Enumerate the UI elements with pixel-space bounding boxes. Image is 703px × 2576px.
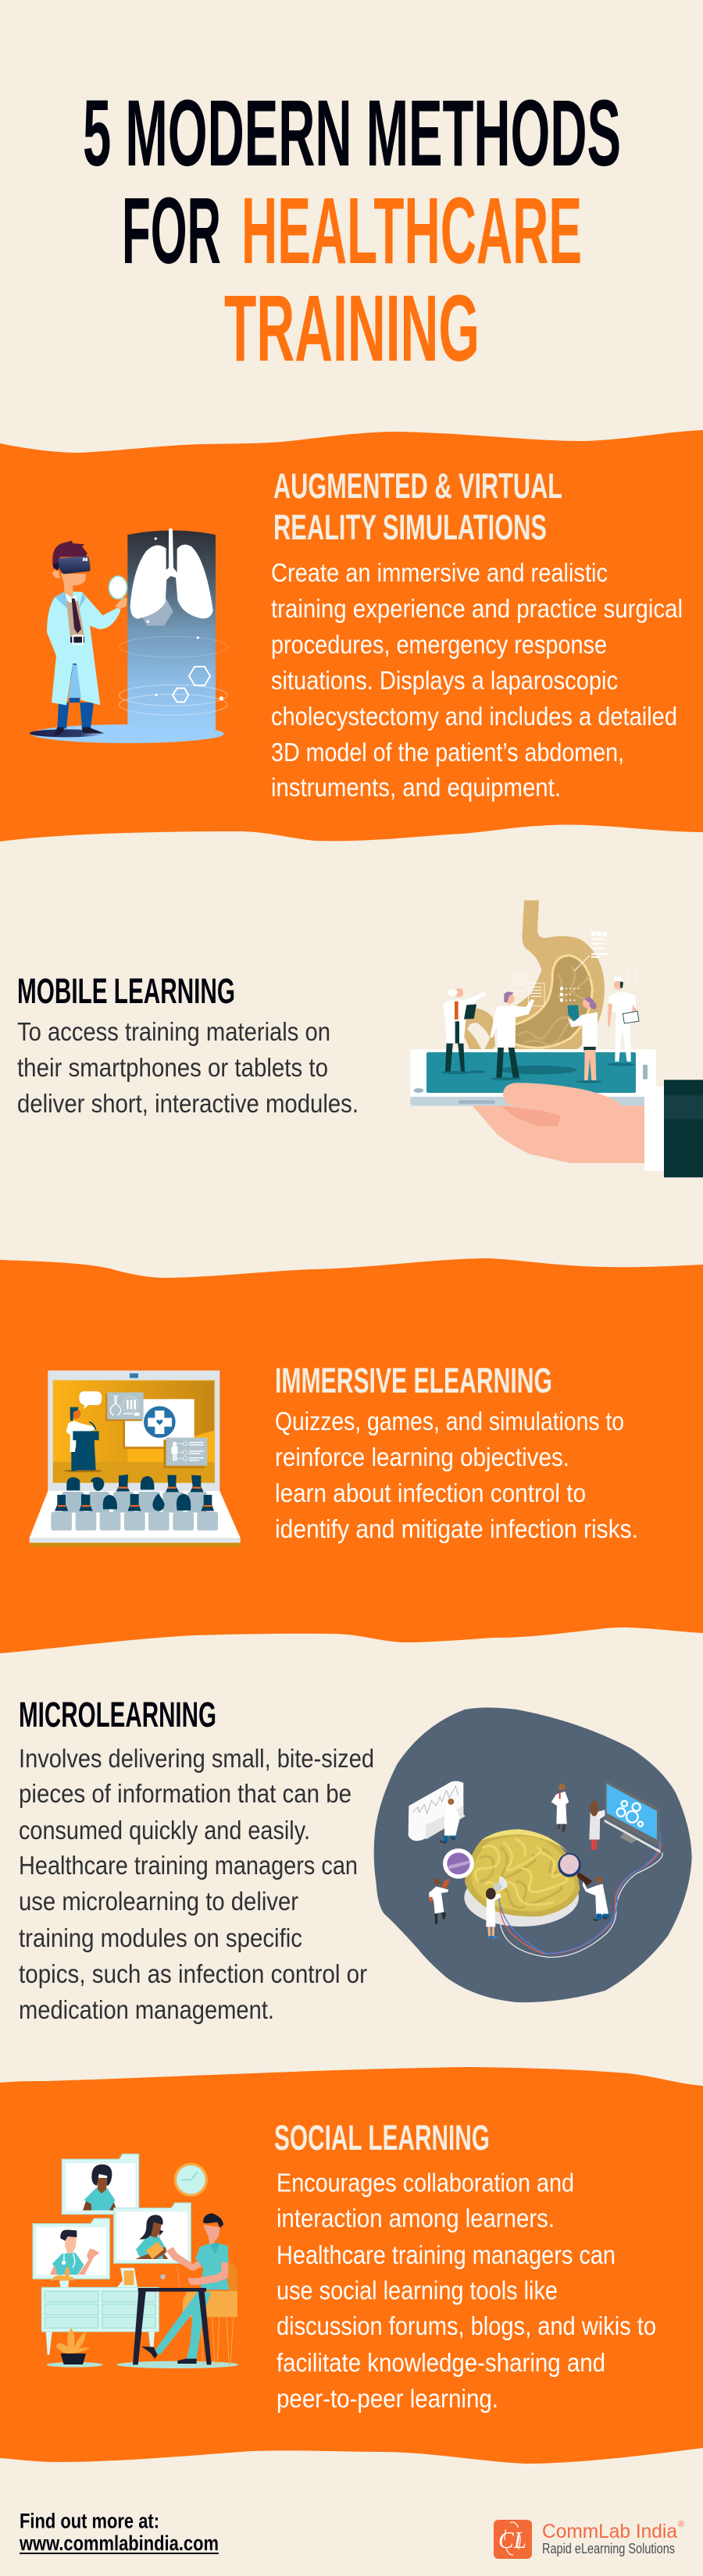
panel: augmented and virtual reality simulations <box>0 430 703 841</box>
text block: augmented and virtual reality description: 3D model of the patient’s abdomen, <box>271 738 624 767</box>
orange wave band 3 <box>0 2067 703 2464</box>
text block: augmented and virtual reality description: procedures, emergency response <box>271 630 607 659</box>
orange wave band 1 <box>0 430 703 841</box>
text block: microlearning description: training modules on specific <box>19 1923 302 1952</box>
text block: social learning description: peer-to-peer learning. <box>277 2384 498 2413</box>
footer: find out more link <box>19 2509 219 2555</box>
logo: CommLab India: Rapid eLearning Solutions <box>542 2541 675 2556</box>
heading: immersive elearning: IMMERSIVE ELEARNING <box>275 1361 552 1400</box>
logo: CommLab India: ® <box>678 2520 684 2529</box>
heading: microlearning: MICROLEARNING <box>19 1695 216 1735</box>
logo: CommLab India: CL <box>498 2526 526 2553</box>
text block: social learning description: discussion forums, blogs, and wikis to <box>277 2311 656 2340</box>
panel: mobile learning <box>17 900 703 1177</box>
title: TRAINING <box>224 275 480 381</box>
icon: doctor in VR headset with lungs hologram <box>30 528 227 743</box>
text block: microlearning description: medication management. <box>19 1995 274 2024</box>
panel: social learning <box>0 2067 703 2464</box>
text block: social learning description: facilitate knowledge-sharing and <box>277 2348 605 2377</box>
logo: CommLab India: CommLab India <box>542 2521 677 2542</box>
text block: immersive elearning description <box>275 1407 638 1543</box>
text block: immersive elearning description: Quizzes, games, and simulations to <box>275 1407 624 1436</box>
title: FOR <box>122 177 221 283</box>
panel: immersive elearning <box>0 1258 703 1653</box>
text block: immersive elearning description: identify and mitigate infection risks. <box>275 1514 638 1543</box>
text block: mobile learning description: To access training materials on <box>17 1017 330 1046</box>
heading: social learning: SOCIAL LEARNING <box>274 2118 490 2158</box>
text block: augmented and virtual reality description: situations. Displays a laparoscopic <box>271 666 618 695</box>
text block: microlearning description <box>19 1744 374 2024</box>
logo: CommLab India <box>494 2520 684 2559</box>
text block: immersive elearning description: learn about infection control to <box>275 1478 586 1507</box>
text block: mobile learning description: deliver short, interactive modules. <box>17 1089 359 1118</box>
text block: augmented and virtual reality description: Create an immersive and realistic <box>271 558 608 587</box>
title <box>83 80 621 381</box>
icon: nurse on video call with colleagues <box>33 2154 238 2368</box>
text block: augmented and virtual reality description <box>271 558 683 802</box>
text block: immersive elearning description: reinforce learning objectives. <box>275 1443 569 1471</box>
heading: mobile learning: MOBILE LEARNING <box>17 971 235 1011</box>
icon: laptop with classroom lecture <box>30 1371 241 1547</box>
orange wave band 2 <box>0 1258 703 1653</box>
text block: augmented and virtual reality description: instruments, and equipment. <box>271 773 561 802</box>
heading: augmented and virtual reality simulations: AUGMENTED & VIRTUAL <box>273 466 562 506</box>
text block: mobile learning description: their smartphones or tablets to <box>17 1053 328 1082</box>
heading: augmented and virtual reality simulations: REALITY SIMULATIONS <box>273 507 547 547</box>
heading: augmented and virtual reality simulations <box>273 466 562 547</box>
text block: microlearning description: Involves delivering small, bite-sized <box>19 1744 374 1773</box>
panel: microlearning <box>19 1695 692 2024</box>
text block: social learning description <box>277 2169 656 2413</box>
text block: microlearning description: consumed quickly and easily. <box>19 1816 310 1845</box>
footer: find out more link: Find out more at: <box>20 2509 159 2532</box>
text block: social learning description: Healthcare training managers can <box>277 2240 616 2269</box>
footer: find out more link: www.commlabindia.com <box>19 2532 219 2555</box>
text block: social learning description: use social learning tools like <box>277 2276 558 2304</box>
text block: social learning description: interaction among learners. <box>277 2204 555 2233</box>
text block: microlearning description: Healthcare training managers can <box>19 1851 358 1880</box>
text block: mobile learning description <box>17 1017 359 1118</box>
icon: hand holding phone with stomach and doctors <box>410 900 703 1177</box>
text block: social learning description: Encourages collaboration and <box>277 2169 574 2197</box>
text block: microlearning description: use microlearning to deliver <box>19 1887 298 1916</box>
icon: scientists examining a brain on a dark blob <box>374 1708 692 2002</box>
text block: microlearning description: topics, such as infection control or <box>19 1959 367 1988</box>
text block: microlearning description: pieces of information that can be <box>19 1779 352 1808</box>
